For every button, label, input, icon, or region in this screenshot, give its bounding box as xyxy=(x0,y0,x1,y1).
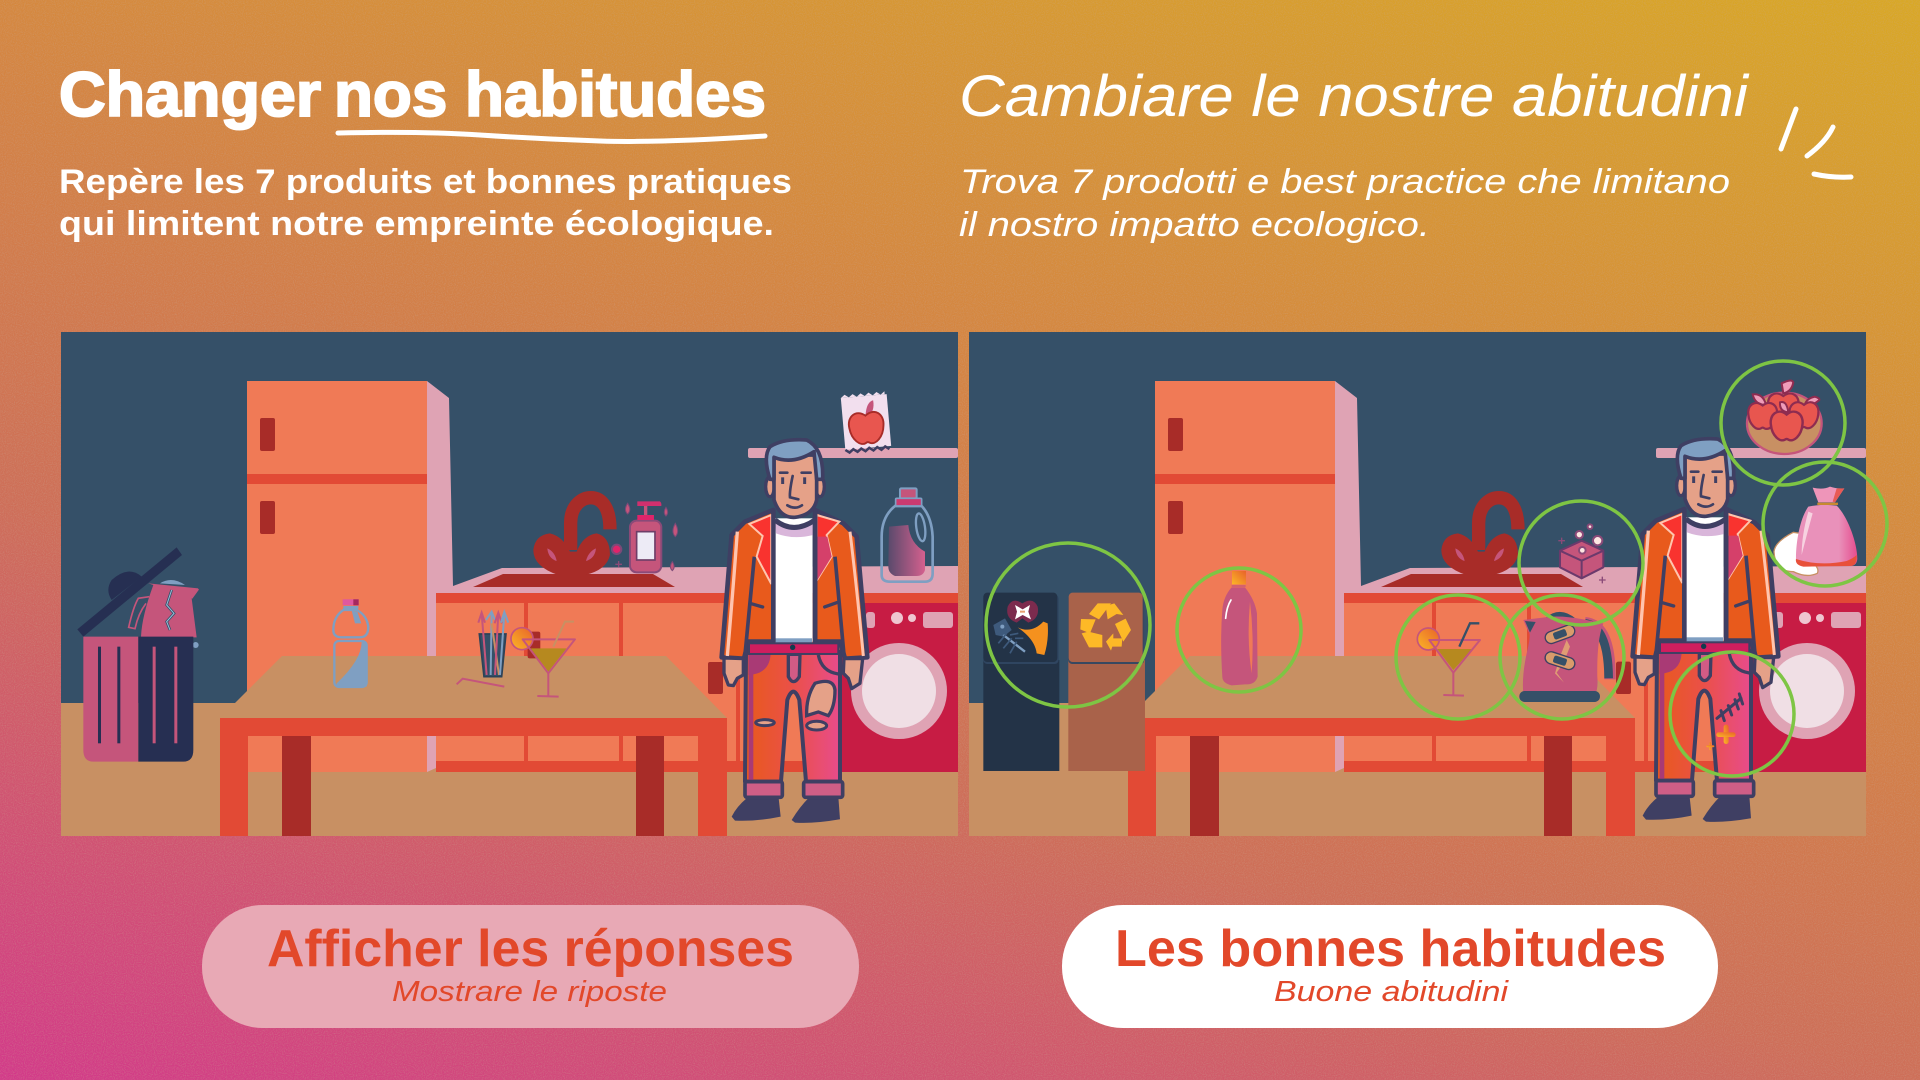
character: man with torn jeans xyxy=(722,440,867,823)
icon: cocktail with plastic straw xyxy=(511,622,575,697)
circle: bag xyxy=(1763,462,1887,586)
title: French: nos habitudes xyxy=(334,60,766,130)
title: French xyxy=(59,60,766,141)
icon: reusable bag and flour xyxy=(1774,487,1857,575)
icon: solid soap bar xyxy=(1558,524,1606,583)
subtitle: French: Repère les 7 produits et bonnes pratiques xyxy=(59,163,792,201)
decorative spark strokes xyxy=(1781,109,1851,177)
icon: repaired kettle with bandages xyxy=(1519,612,1631,702)
icon: apple packet xyxy=(841,391,891,453)
title: French: Changer xyxy=(59,60,321,130)
answer circles xyxy=(986,361,1887,776)
panel: kitchen with good habits xyxy=(969,332,1887,836)
circle: kettle xyxy=(1500,595,1624,719)
title: Italian: Cambiare le nostre abitudini xyxy=(959,64,1750,129)
button: show answers xyxy=(202,905,859,1028)
icon: plastic water bottle xyxy=(333,599,368,687)
icon: compost and recycling bins xyxy=(983,593,1145,771)
circle: bins xyxy=(986,543,1150,707)
button: show answers: Afficher les réponses xyxy=(267,920,794,978)
kitchen scene xyxy=(61,381,958,836)
icon: trash can with broken kettle xyxy=(77,547,199,762)
wall xyxy=(61,332,958,836)
character: man with repaired jeans xyxy=(1633,439,1778,822)
icon: cocktail with reusable straw xyxy=(1417,623,1480,696)
icon: bowl of apples xyxy=(1747,381,1822,454)
icon: plastic straws xyxy=(457,612,508,687)
button: show answers: Mostrare le riposte xyxy=(392,976,667,1008)
panel: kitchen with bad habits xyxy=(61,332,958,836)
button: good habits xyxy=(1062,905,1718,1028)
subtitle: Italian: il nostro impatto ecologico. xyxy=(959,206,1430,244)
kitchen scene xyxy=(969,381,1866,836)
subtitle: Italian: Trova 7 prodotti e best practice che limitano xyxy=(960,163,1730,201)
subtitle: French xyxy=(59,163,792,243)
wall xyxy=(969,332,1866,836)
circle: cocktail xyxy=(1396,595,1520,719)
circle: glass bottle xyxy=(1177,568,1301,692)
icon: plastic detergent bottle xyxy=(882,488,933,582)
icon: liquid soap bottle xyxy=(612,501,678,572)
subtitle: French: qui limitent notre empreinte écologique. xyxy=(59,205,774,243)
button: good habits: Les bonnes habitudes xyxy=(1115,920,1666,978)
circle: apples xyxy=(1721,361,1845,485)
subtitle: Italian xyxy=(959,163,1730,244)
circle: soap xyxy=(1519,501,1643,625)
circle: jeans xyxy=(1670,652,1794,776)
button: good habits: Buone abitudini xyxy=(1274,976,1510,1008)
icon: reusable glass bottle xyxy=(1221,571,1258,685)
